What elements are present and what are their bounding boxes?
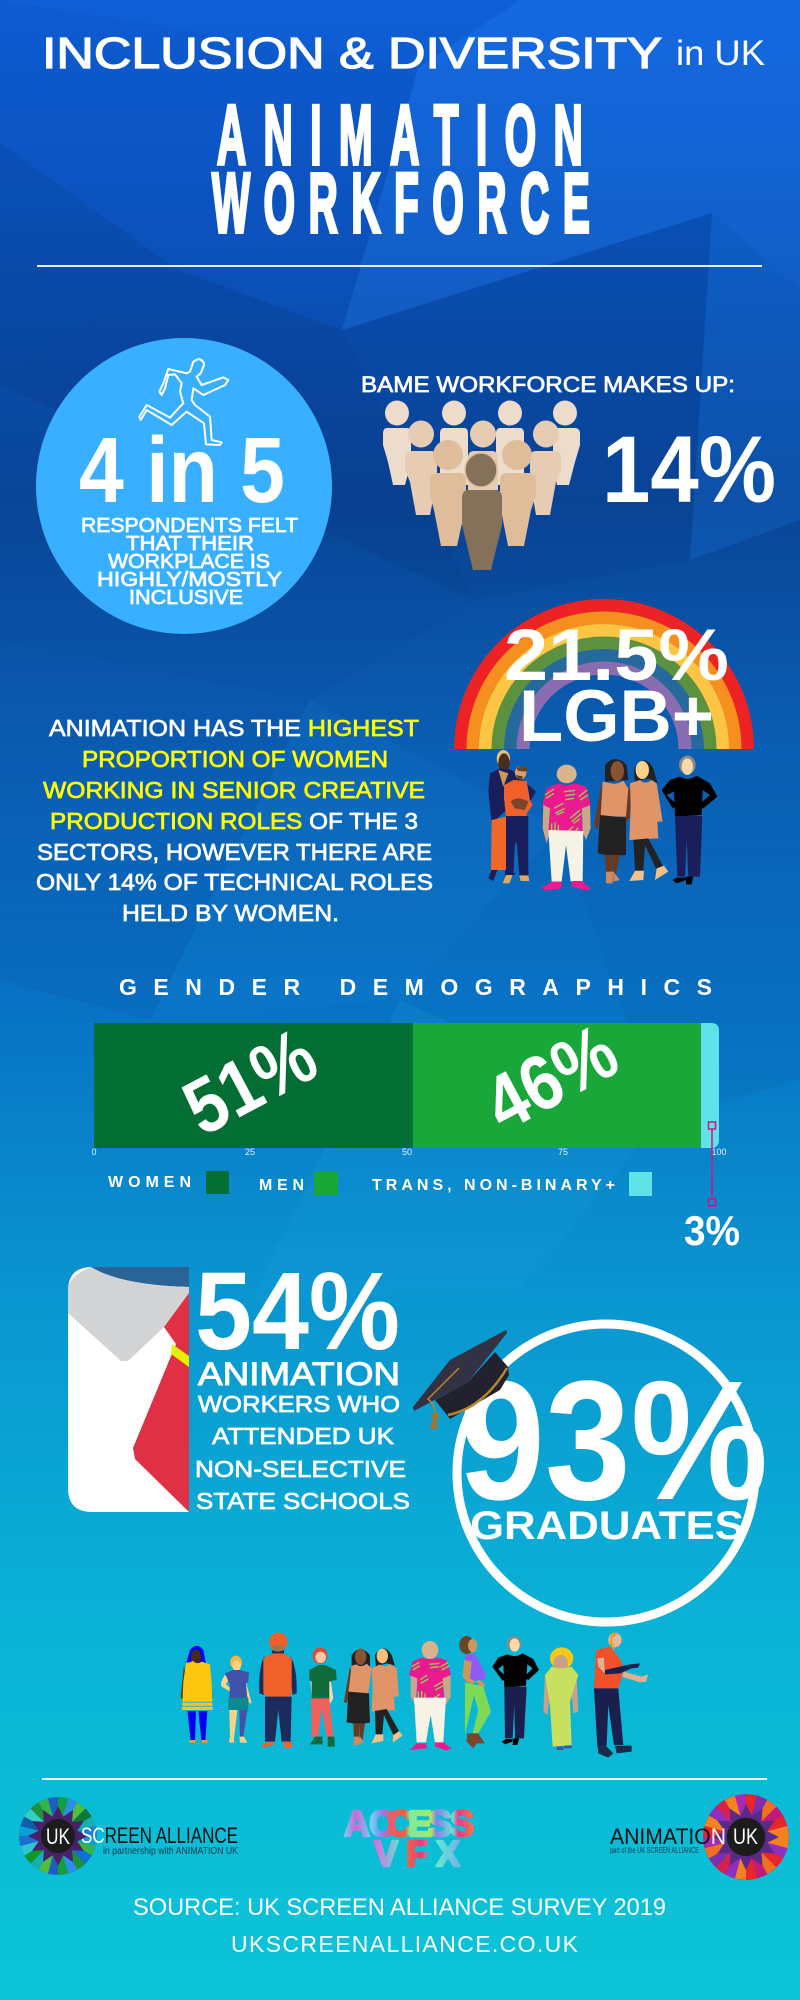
connector: 3 percent callout bbox=[708, 1122, 716, 1206]
legend: MEN bbox=[259, 1177, 304, 1194]
value: 3 percent: 3% bbox=[684, 1207, 740, 1254]
text: animation workers who attended bbox=[195, 1356, 410, 1514]
axis labels bbox=[91, 1147, 727, 1157]
stat: 93 percent: 93% bbox=[459, 1346, 768, 1536]
text block: women in senior creative roles bbox=[36, 715, 433, 926]
panel: 4 in 5 respondents bbox=[36, 338, 332, 634]
logo: UK Screen Alliance: SCREEN ALLIANCE bbox=[81, 1823, 238, 1848]
stat: 21.5 percent: 21.5% bbox=[504, 615, 729, 696]
label: LGB+: LGB+ bbox=[519, 676, 714, 757]
logo: Animation UK: part of the UK SCREEN ALLIANCE bbox=[610, 1846, 699, 1855]
icon: starburst badge bbox=[702, 1793, 790, 1881]
axis labels: 100 bbox=[711, 1147, 727, 1157]
logo: Animation UK bbox=[610, 1793, 790, 1881]
logo: Access VFX: ACCESS bbox=[344, 1803, 474, 1844]
panel: BAME workforce bbox=[361, 372, 776, 570]
stat: 14 percent: 14% bbox=[602, 417, 776, 523]
title: animation workforce: ANIMATION bbox=[217, 88, 583, 182]
heading: inclusion and diversity: INCLUSION & DIVERSITY bbox=[42, 29, 662, 78]
text block: women in senior creative roles: PROPORTION OF WOMEN bbox=[82, 746, 388, 772]
axis labels: 50 bbox=[402, 1147, 412, 1157]
heading: inclusion and diversity: in UK bbox=[676, 34, 765, 73]
logo: Animation UK: UK bbox=[733, 1824, 758, 1849]
text block: women in senior creative roles: ONLY 14% OF TECHNICAL ROLES bbox=[36, 869, 433, 895]
icon: school uniform bbox=[68, 1267, 189, 1512]
panel: gender demographics bbox=[91, 974, 740, 1254]
value: women 51 percent: 51% bbox=[170, 1012, 330, 1152]
icon: runner bbox=[139, 359, 228, 445]
text block: women in senior creative roles: HELD BY WOMEN. bbox=[122, 900, 339, 926]
heading: gender demographics: GENDER DEMOGRAPHICS bbox=[119, 974, 712, 1000]
logo: Access VFX: VFX bbox=[374, 1833, 460, 1874]
logo: UK Screen Alliance: UK bbox=[46, 1824, 70, 1849]
panel: LGB+ rainbow bbox=[460, 606, 748, 891]
text: animation workers who attended: STATE SCHOOLS bbox=[196, 1488, 410, 1514]
icon: crowd of people bbox=[383, 400, 580, 570]
panel: graduates bbox=[413, 1324, 768, 1622]
axis labels: 75 bbox=[558, 1147, 568, 1157]
title: animation workforce bbox=[212, 88, 590, 250]
text: animation workers who attended: ANIMATION bbox=[198, 1356, 400, 1392]
people row bbox=[181, 1633, 648, 1758]
website: UKSCREENALLIANCE.CO.UK bbox=[231, 1931, 579, 1957]
stat: 4 in 5: 4 in 5 bbox=[79, 418, 285, 522]
text: animation workers who attended: WORKERS WHO bbox=[198, 1391, 400, 1417]
text block: women in senior creative roles: ANIMATION HAS THE HIGHEST bbox=[49, 715, 419, 741]
text: respondents felt bbox=[81, 515, 298, 609]
text block: women in senior creative roles: PRODUCTION ROLES OF THE 3 bbox=[50, 808, 418, 834]
text: respondents felt: RESPONDENTS FELT bbox=[81, 515, 298, 537]
text: animation workers who attended: NON-SELECTIVE bbox=[195, 1456, 406, 1482]
legend: WOMEN bbox=[108, 1174, 191, 1191]
axis labels: 0 bbox=[91, 1147, 97, 1157]
text: respondents felt: INCLUSIVE bbox=[129, 587, 243, 609]
heading: BAME workforce makes up: BAME WORKFORCE MAKES UP: bbox=[361, 372, 735, 397]
bar chart: gender split bbox=[91, 1008, 727, 1157]
source line: SOURCE: UK SCREEN ALLIANCE SURVEY 2019 bbox=[133, 1894, 666, 1921]
logo: Access VFX bbox=[344, 1803, 474, 1874]
logo: Animation UK: ANIMATION bbox=[610, 1824, 726, 1849]
legend: TRANS, NON-BINARY+ bbox=[372, 1177, 615, 1194]
title: animation workforce: WORKFORCE bbox=[212, 156, 590, 250]
text: respondents felt: THAT THEIR bbox=[126, 533, 254, 555]
axis labels: 25 bbox=[245, 1147, 255, 1157]
text: animation workers who attended: ATTENDED UK bbox=[212, 1423, 395, 1449]
value: men 46 percent: 46% bbox=[471, 1008, 631, 1148]
logo: UK Screen Alliance bbox=[18, 1796, 238, 1876]
text block: women in senior creative roles: SECTORS, HOWEVER THERE ARE bbox=[37, 839, 432, 865]
text: respondents felt: HIGHLY/MOSTLY bbox=[97, 569, 282, 591]
stat: 54 percent: 54% bbox=[195, 1250, 400, 1373]
icon: graduation cap bbox=[413, 1330, 509, 1429]
icon: rainbow bbox=[460, 606, 748, 749]
logo: UK Screen Alliance: in partnership with ANIMATION UK bbox=[103, 1846, 238, 1857]
panel: state schools bbox=[68, 1250, 410, 1514]
text block: women in senior creative roles: WORKING IN SENIOR CREATIVE bbox=[43, 777, 425, 803]
label: graduates: GRADUATES bbox=[470, 1504, 744, 1548]
people group bbox=[488, 750, 717, 891]
text: respondents felt: WORKPLACE IS bbox=[108, 551, 270, 573]
legend bbox=[108, 1171, 652, 1196]
icon: starburst badge bbox=[18, 1796, 98, 1876]
